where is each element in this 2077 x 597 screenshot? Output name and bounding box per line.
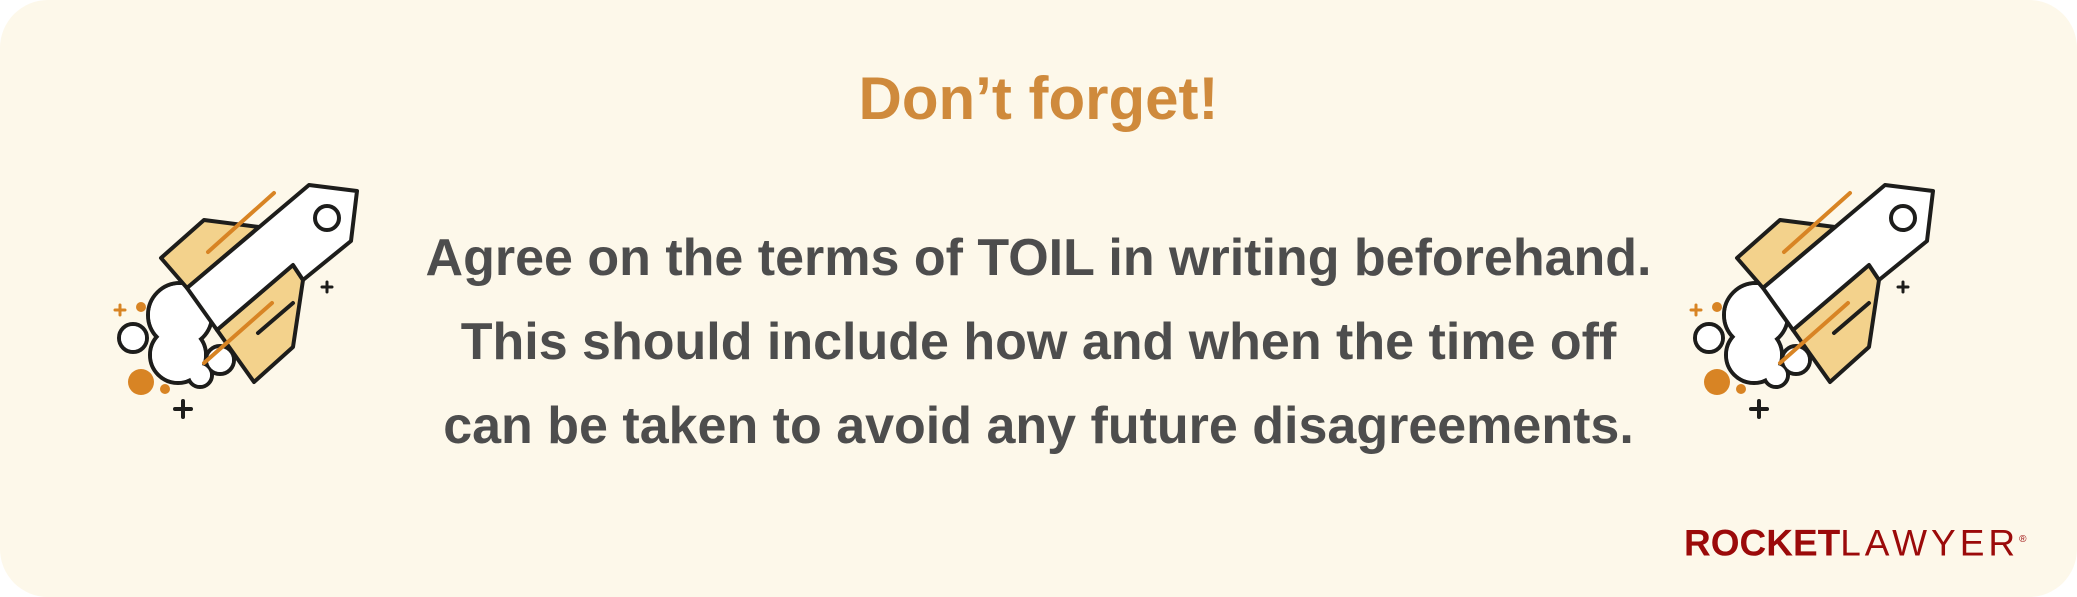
- icon: rocket right: [1690, 183, 1935, 419]
- icon: rocket left: [114, 183, 359, 419]
- body text: can be taken to avoid any future disagreements.: [443, 397, 1634, 455]
- body text: Agree on the terms of TOIL in writing beforehand.: [426, 229, 1651, 287]
- title: Don’t forget!: [859, 65, 1218, 132]
- body text: [426, 229, 1651, 455]
- body text: This should include how and when the time off: [461, 313, 1616, 371]
- logo: ROCKETLAWYER®: [1684, 522, 2026, 563]
